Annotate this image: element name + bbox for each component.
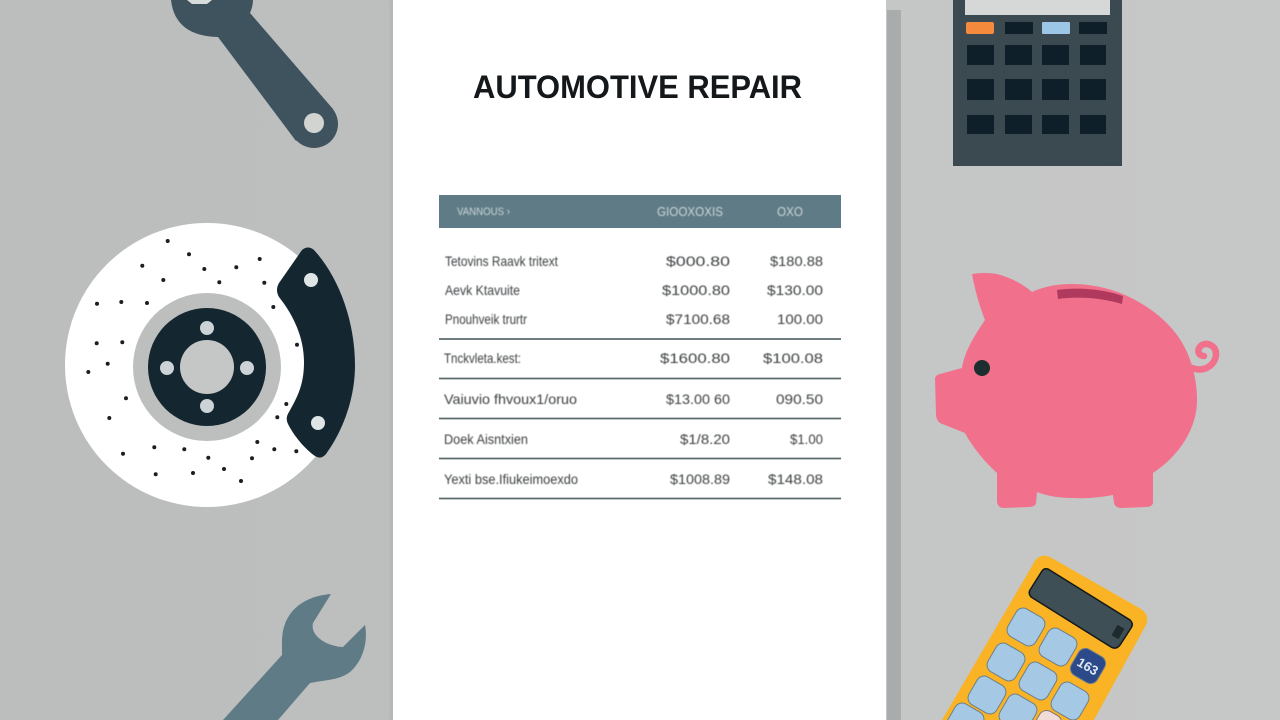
calculator screen	[1029, 569, 1132, 648]
table rows: $000.80	[666, 253, 730, 269]
table rows: Tnckvleta.kest:	[444, 350, 521, 366]
table rows: $180.88	[770, 253, 823, 269]
table rows: $1/8.20	[680, 431, 730, 447]
table rows: $130.00	[767, 282, 823, 298]
tail	[1192, 344, 1216, 369]
equals key: 163	[1074, 654, 1101, 678]
table rows: Pnouhveik trurtr	[445, 311, 527, 327]
equals key	[1068, 646, 1108, 686]
wrench: bottom left	[223, 594, 366, 720]
icon: piggy bank	[935, 273, 1216, 508]
title: AUTOMOTIVE REPAIR	[473, 69, 802, 105]
table rows: $148.08	[768, 471, 823, 487]
table rows: Tetovins Raavk tritext	[445, 253, 558, 269]
table rows: $1600.80	[660, 350, 730, 366]
icon: yellow calculator	[942, 556, 1147, 720]
table rows: $100.08	[763, 350, 823, 366]
table rows: $13.00 60	[666, 391, 730, 407]
panel: invoice sheet	[393, 0, 886, 720]
icon: brake disc	[65, 223, 355, 507]
calculator keys	[943, 605, 1092, 720]
eye	[974, 360, 990, 376]
table rows: $1.00	[790, 431, 823, 447]
table rows	[439, 253, 841, 498]
table rows: $7100.68	[666, 311, 730, 327]
table rows: Doek Aisntxien	[444, 431, 528, 447]
table header	[439, 195, 841, 228]
table header: OXO	[777, 204, 803, 219]
table header: GIOOXOXIS	[657, 204, 723, 219]
icon: brake caliper	[277, 248, 355, 458]
icon: dark calculator	[953, 0, 1122, 166]
table rows: Vaiuvio fhvoux1/oruo	[444, 391, 577, 407]
table header: VANNOUS ›	[457, 206, 510, 218]
table rows: $1008.89	[670, 471, 730, 487]
wrench: top left	[171, 0, 338, 148]
table rows: Aevk Ktavuite	[445, 282, 520, 298]
paper shadow	[390, 0, 901, 720]
table rows: Yexti bse.Ifiukeimoexdo	[444, 471, 578, 487]
table rows: $1000.80	[662, 282, 730, 298]
coin slot	[1057, 289, 1123, 304]
table rows: 100.00	[777, 311, 823, 327]
table rows: 090.50	[776, 391, 823, 407]
